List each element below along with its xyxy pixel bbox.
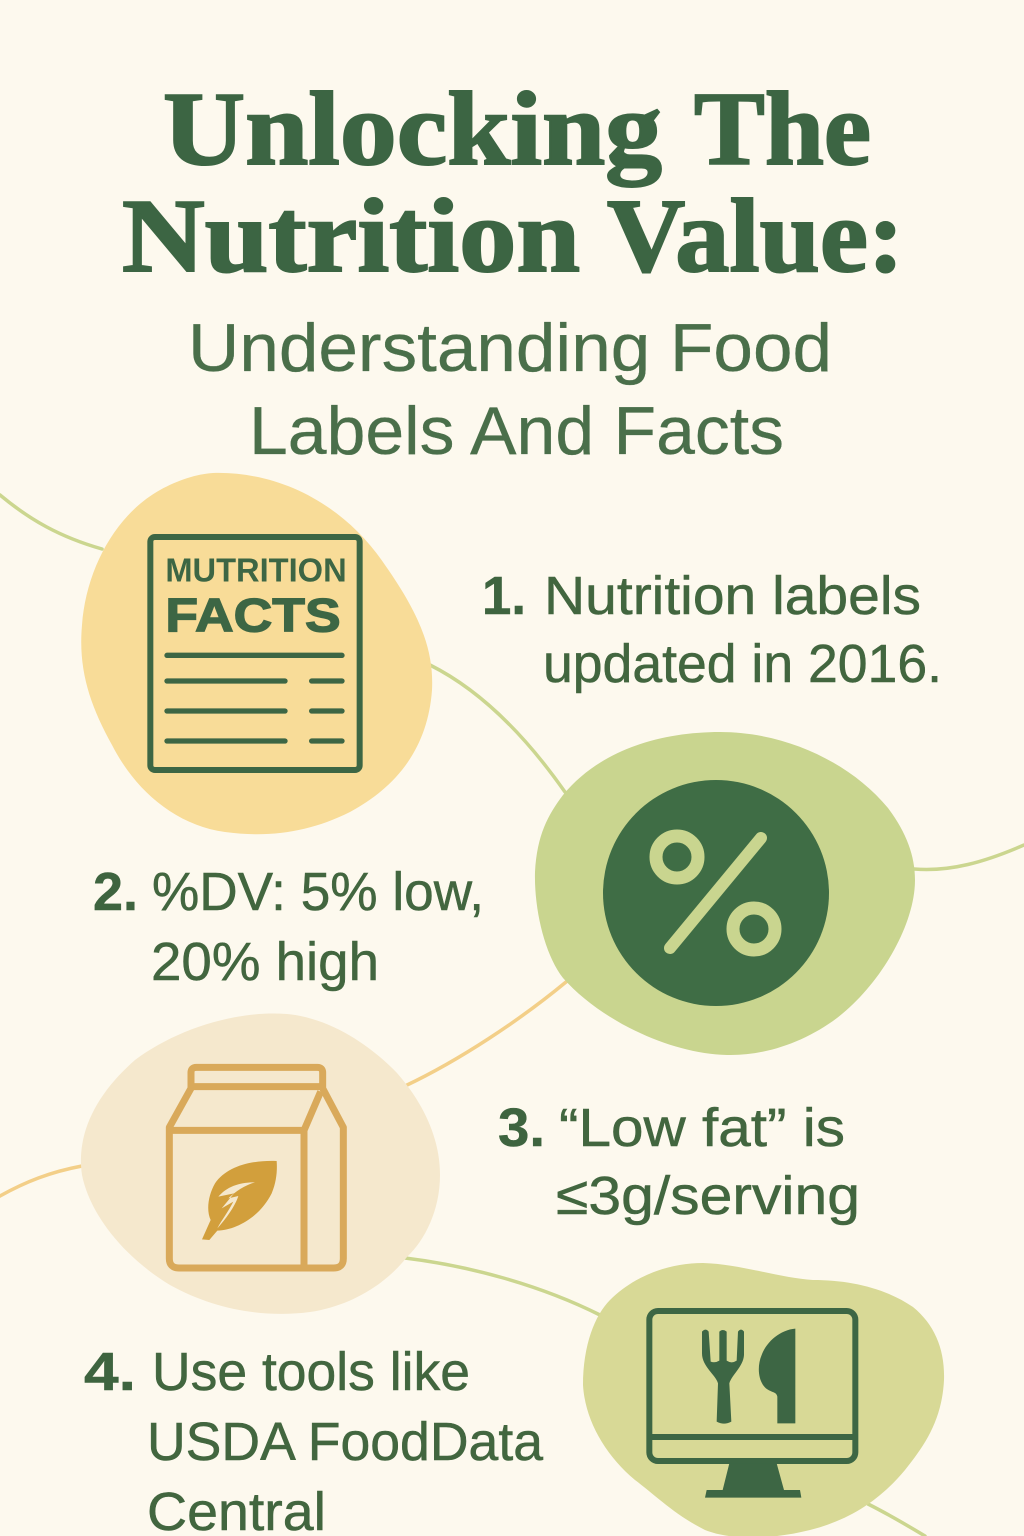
icon: percent sign <box>603 780 829 1006</box>
title: The <box>694 70 871 187</box>
text block: item 2: %DV: 5% low, <box>152 862 484 922</box>
text block: item 2: 20% high <box>151 932 379 992</box>
text block: item 4 <box>84 1342 544 1536</box>
subtitle <box>188 310 832 469</box>
text block: item 4: Use tools like <box>152 1342 470 1402</box>
text block: item 3: 3. <box>498 1098 545 1158</box>
text block: item 3: “Low fat” is <box>559 1098 845 1158</box>
icon: monitor with fork and knife <box>649 1311 856 1498</box>
text block: item 3: ≤3g/serving <box>556 1166 860 1226</box>
text block: item 1: updated in 2016. <box>543 634 942 694</box>
text block: item 1: 1. <box>482 566 526 626</box>
text block: item 2: 2. <box>93 862 138 922</box>
text block: item 3 <box>498 1098 860 1226</box>
text block: item 1: Nutrition labels <box>544 566 921 626</box>
subtitle: Labels And Facts <box>249 393 784 469</box>
icon: leaf <box>202 1161 277 1240</box>
icon: nutrition facts label: MUTRITION <box>165 553 347 590</box>
text block: item 4: USDA FoodData <box>147 1412 544 1472</box>
icon: nutrition facts label: FACTS <box>165 590 341 643</box>
panel: nutrition facts blob <box>81 473 432 834</box>
text block: item 2 <box>93 862 484 992</box>
panel: monitor blob <box>583 1263 944 1536</box>
subtitle: Understanding Food <box>188 310 832 386</box>
icon: food package with leaf <box>169 1067 343 1268</box>
icon: nutrition facts label <box>150 537 360 770</box>
title: Nutrition <box>122 177 580 294</box>
panel: percent blob <box>535 732 915 1055</box>
text block: item 4: 4. <box>84 1342 136 1402</box>
title: Unlocking <box>163 70 662 187</box>
connector lines <box>0 495 1024 1536</box>
title: Value: <box>607 177 904 294</box>
title <box>122 70 904 294</box>
panel: food package blob <box>81 1013 440 1314</box>
text block: item 1 <box>482 566 942 694</box>
